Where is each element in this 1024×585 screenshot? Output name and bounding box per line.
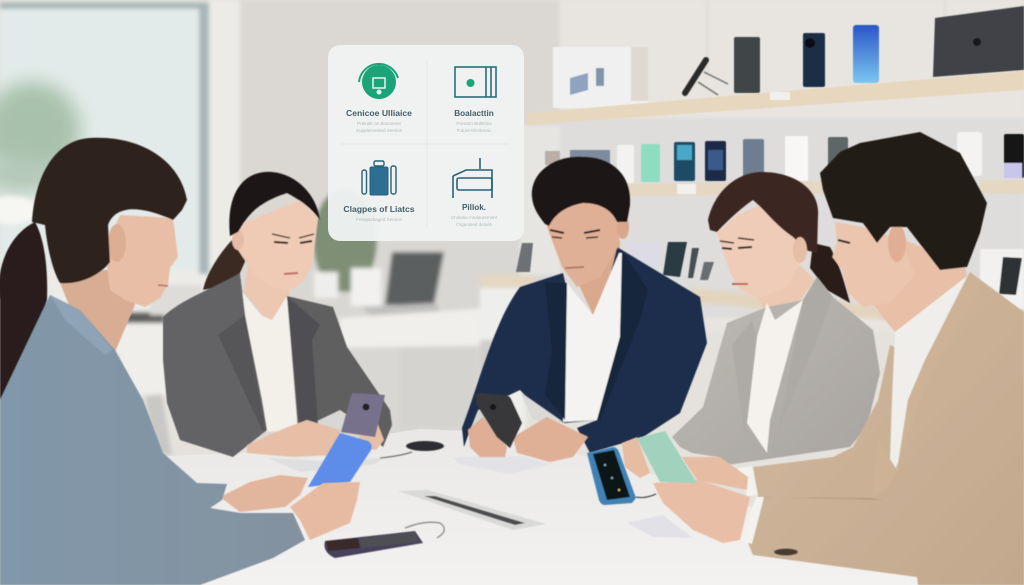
ponytail <box>810 243 850 303</box>
laptop <box>385 252 444 305</box>
lower hand <box>653 480 750 543</box>
face <box>547 199 622 287</box>
table items <box>268 441 693 558</box>
sleeve buttons <box>774 548 798 556</box>
product box <box>553 47 648 108</box>
phone: purple <box>341 393 385 437</box>
middle shelf products <box>545 132 1024 196</box>
text: bottom right: Pillok. <box>462 203 486 212</box>
text: bottom left: Freepackaged Service <box>356 217 402 222</box>
ponytail <box>203 240 250 290</box>
notebook <box>453 456 553 474</box>
laptop on shelf <box>933 6 1024 77</box>
text: top left: Cenicoe Ulliaice <box>346 108 412 118</box>
lapels <box>545 282 567 420</box>
tripod <box>685 60 728 95</box>
hair <box>229 172 320 236</box>
back desk <box>240 240 520 440</box>
phone: mint <box>637 431 697 483</box>
face <box>717 205 800 298</box>
middle shelf board <box>628 181 830 196</box>
lower shelf <box>480 275 535 287</box>
lapel <box>872 272 980 498</box>
text: bottom left <box>343 204 415 222</box>
blazer <box>672 277 880 466</box>
person: man in beige blazer <box>653 132 1024 585</box>
power bank <box>734 37 760 93</box>
table <box>155 429 920 585</box>
lapels <box>770 277 833 450</box>
ponytail <box>0 222 47 400</box>
text: top left: Prelude an document <box>357 121 402 126</box>
chair <box>145 394 172 455</box>
icon: battery case <box>362 161 396 195</box>
charging phone on table <box>324 522 444 558</box>
face <box>105 215 178 307</box>
wireless charger <box>380 441 444 458</box>
upper hand <box>682 457 748 490</box>
blue phone <box>853 25 879 83</box>
icon: green robot circle <box>359 64 398 99</box>
navy jacket <box>462 247 707 453</box>
shirt <box>747 300 803 453</box>
hair <box>820 132 987 270</box>
cuffs <box>738 466 758 496</box>
upper shelf board <box>527 71 1024 125</box>
blazer <box>163 273 267 457</box>
icon: card frame <box>455 67 496 97</box>
phones held <box>308 393 697 505</box>
face <box>238 200 318 290</box>
hair <box>32 138 187 283</box>
text: top right <box>454 109 494 133</box>
neck <box>55 270 135 352</box>
lapels <box>218 273 266 432</box>
plant <box>313 188 377 292</box>
upper hand <box>220 475 308 512</box>
dark phone <box>803 33 825 87</box>
text: bottom left: Clagpes of Liatcs <box>343 204 415 214</box>
text: top left <box>346 108 412 133</box>
icon: device tray <box>453 158 492 198</box>
gap below arm <box>520 392 563 422</box>
hand behind mint phone <box>622 437 650 478</box>
neck <box>863 240 967 332</box>
shirt <box>890 276 967 470</box>
person: foreground woman in blue-grey jacket <box>0 138 360 585</box>
phone: dark grey <box>475 393 522 448</box>
hands <box>468 417 507 457</box>
shirt <box>563 253 623 422</box>
info panel <box>328 45 524 241</box>
left notebook <box>268 457 385 472</box>
phone: teal case device <box>587 447 656 505</box>
lower shelf products <box>516 242 1024 309</box>
neck <box>572 240 620 315</box>
cable port strip <box>398 490 546 530</box>
person: man in navy suit <box>462 157 707 462</box>
hands <box>247 420 340 457</box>
text: top right: Pension Bulletins <box>456 121 492 126</box>
shirt <box>242 292 300 432</box>
text: bottom right: Organised details <box>456 222 493 227</box>
face <box>832 222 915 307</box>
upper shelf products <box>527 6 1024 125</box>
sleeve shading <box>758 497 885 500</box>
person: woman in light grey blazer <box>672 172 880 466</box>
phone: blue <box>308 433 372 487</box>
hair <box>532 157 630 226</box>
text: bottom right <box>451 203 498 227</box>
text: bottom right: Chinese measurement <box>451 215 498 220</box>
blazer <box>748 272 1024 585</box>
text: top left: Supplemented Service <box>356 128 403 133</box>
collar <box>50 295 113 355</box>
person: woman in grey blazer <box>163 172 392 457</box>
jacket <box>0 295 305 585</box>
neck <box>757 265 815 320</box>
hair <box>708 172 818 253</box>
text: top right: Future Electronic <box>457 128 492 133</box>
text: top right: Boalacttin <box>454 109 494 118</box>
neck <box>244 262 290 322</box>
lower hand <box>290 482 360 540</box>
shadow paper right <box>627 515 693 538</box>
